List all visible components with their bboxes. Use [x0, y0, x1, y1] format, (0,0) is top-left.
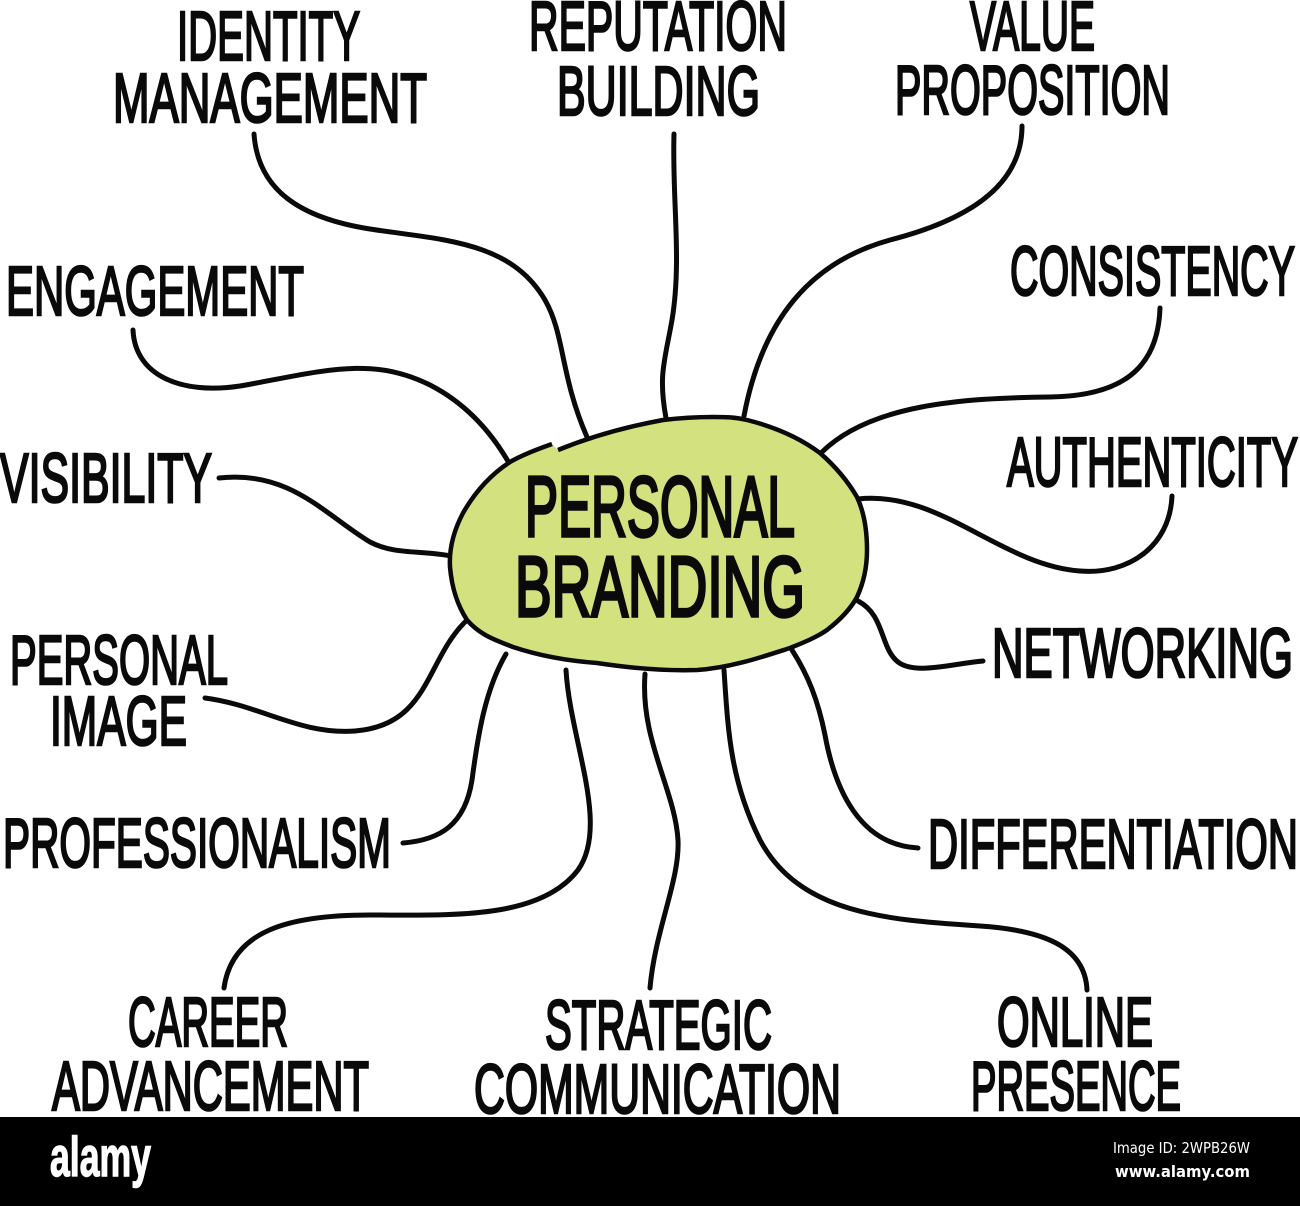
- center title: [515, 460, 805, 635]
- label: career advancement: [52, 983, 369, 1125]
- branch: networking: [858, 601, 983, 668]
- label: strategic communication: STRATEGIC: [545, 986, 772, 1064]
- central blob: [450, 417, 867, 670]
- branch: visibility: [219, 477, 451, 556]
- label: strategic communication: [474, 986, 841, 1128]
- label: personal image: IMAGE: [50, 682, 187, 760]
- image id: Image ID: 2WPB26W: [1113, 1139, 1250, 1157]
- label: reputation building: [529, 0, 787, 130]
- label: identity management: [113, 0, 427, 137]
- label: online presence: [971, 983, 1181, 1125]
- label: value proposition: [895, 0, 1170, 129]
- branch: value proposition: [744, 126, 1022, 416]
- branch: online presence: [724, 670, 1087, 990]
- label: online presence: ONLINE: [997, 983, 1153, 1061]
- branch: differentiation: [792, 650, 918, 848]
- branch: engagement: [133, 330, 509, 463]
- branch: consistency: [822, 308, 1160, 452]
- alamy logo: alamy: [50, 1125, 151, 1188]
- branch: personal image: [205, 620, 467, 731]
- label: career advancement: CAREER: [128, 983, 288, 1061]
- branch: professionalism: [403, 654, 506, 843]
- center title: BRANDING: [515, 540, 805, 635]
- label: strategic communication: COMMUNICATION: [474, 1050, 841, 1128]
- label: personal image: PERSONAL: [10, 621, 228, 699]
- label: reputation building: BUILDING: [557, 52, 760, 130]
- branch: authenticity: [858, 496, 1172, 571]
- label: professionalism: PROFESSIONALISM: [3, 804, 391, 882]
- label: personal image: [10, 621, 228, 760]
- branch: career advancement: [224, 670, 590, 988]
- branch: reputation building: [662, 134, 677, 418]
- label: engagement: ENGAGEMENT: [6, 252, 304, 330]
- watermark footer bar: [0, 1117, 1300, 1206]
- branch: strategic communication: [645, 674, 678, 988]
- label: visibility: VISIBILITY: [0, 439, 212, 517]
- website: www.alamy.com: [1115, 1162, 1250, 1181]
- label: identity management: MANAGEMENT: [113, 59, 427, 137]
- label: career advancement: ADVANCEMENT: [52, 1047, 369, 1125]
- center title: PERSONAL: [525, 460, 795, 555]
- branch: identity management: [254, 134, 587, 437]
